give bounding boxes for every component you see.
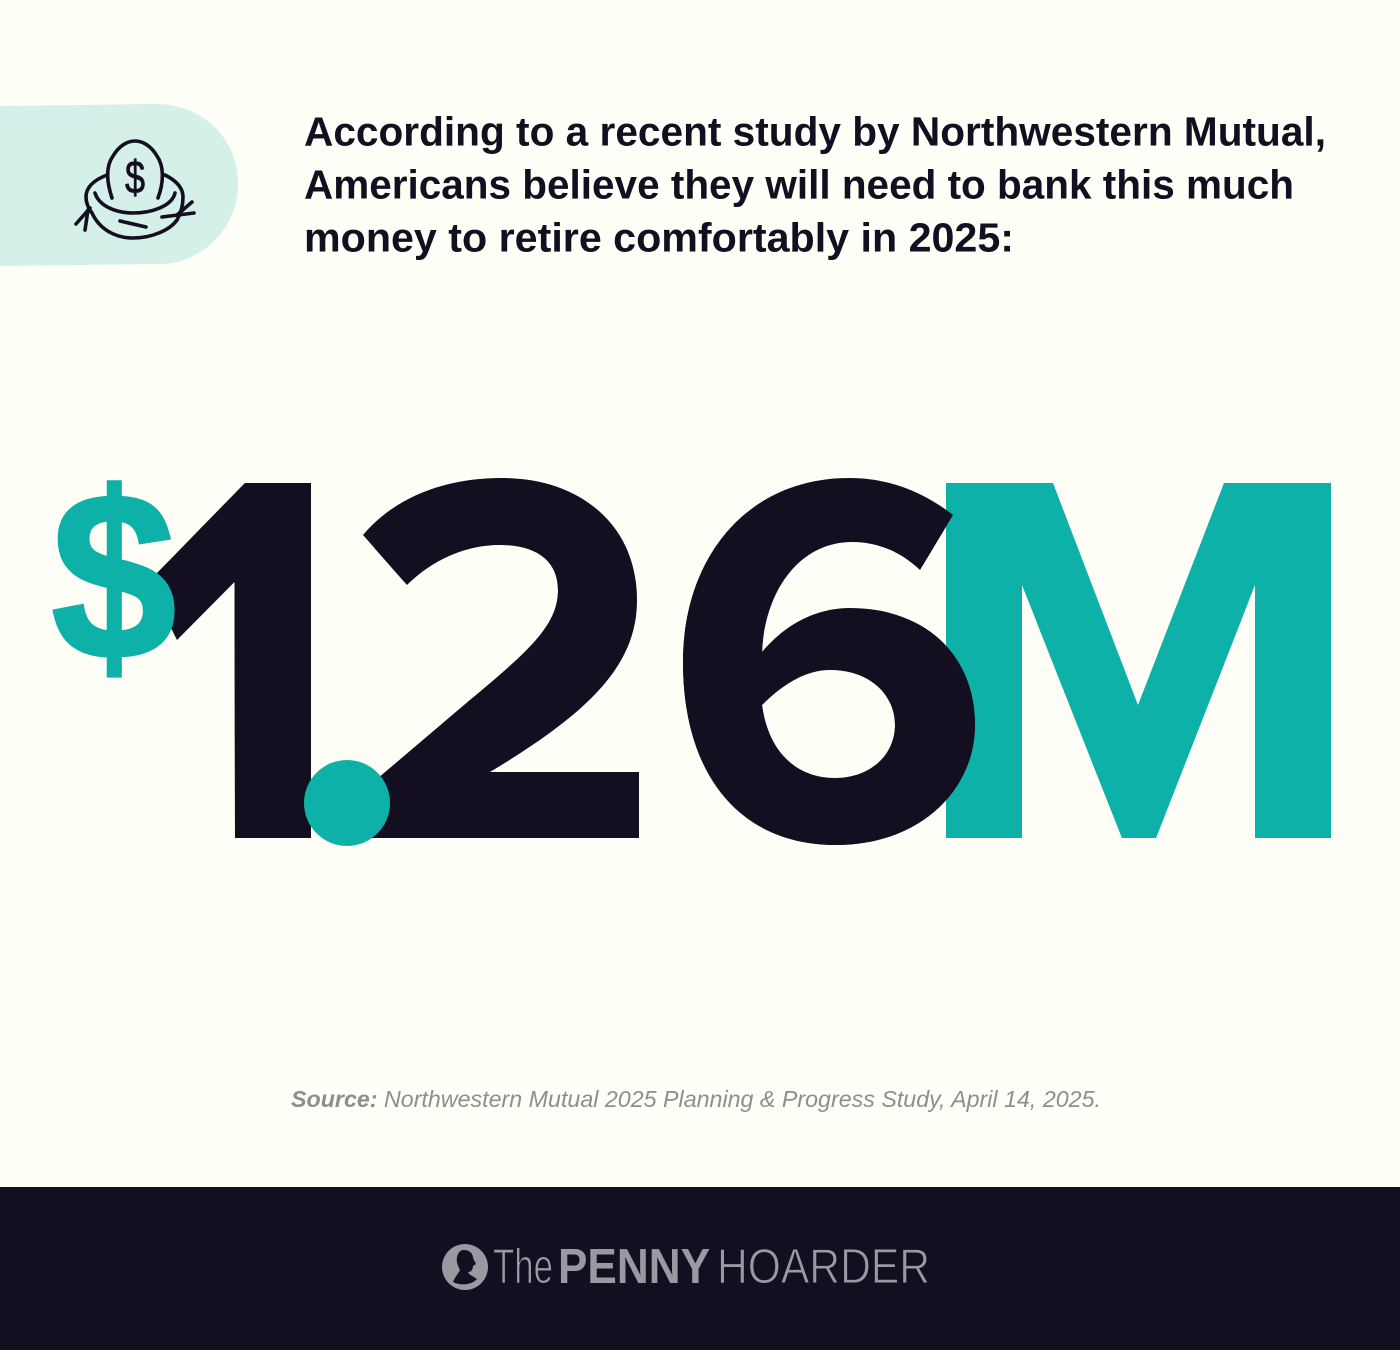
panel: icon pill [0,104,238,266]
digit 6: 6 [659,371,997,950]
icon: coin portrait [442,1244,488,1290]
dollar sign: $ [51,443,176,709]
heading: According to a recent study by Northwestern Mutual, [304,108,1326,154]
logo: The Penny Hoarder: The [493,1240,553,1294]
letter M: M [909,372,1368,948]
heading [304,108,1326,260]
heading: Americans believe they will need to bank this much [304,162,1294,208]
heading: money to retire comfortably in 2025: [304,214,1014,260]
logo: The Penny Hoarder: PENNY [558,1240,710,1294]
icon: nest egg: $ [125,151,145,203]
source note: Source: Northwestern Mutual 2025 Planning & Progress Study, April 14, 2025. [291,1086,1101,1112]
big number: $1.26M [52,478,1331,846]
decimal point [304,760,390,846]
digit 2: 2 [343,372,660,948]
footer bar [0,1187,1400,1350]
logo: The Penny Hoarder [442,1240,930,1294]
icon: nest egg [76,141,194,238]
logo: The Penny Hoarder: HOARDER [717,1240,930,1294]
